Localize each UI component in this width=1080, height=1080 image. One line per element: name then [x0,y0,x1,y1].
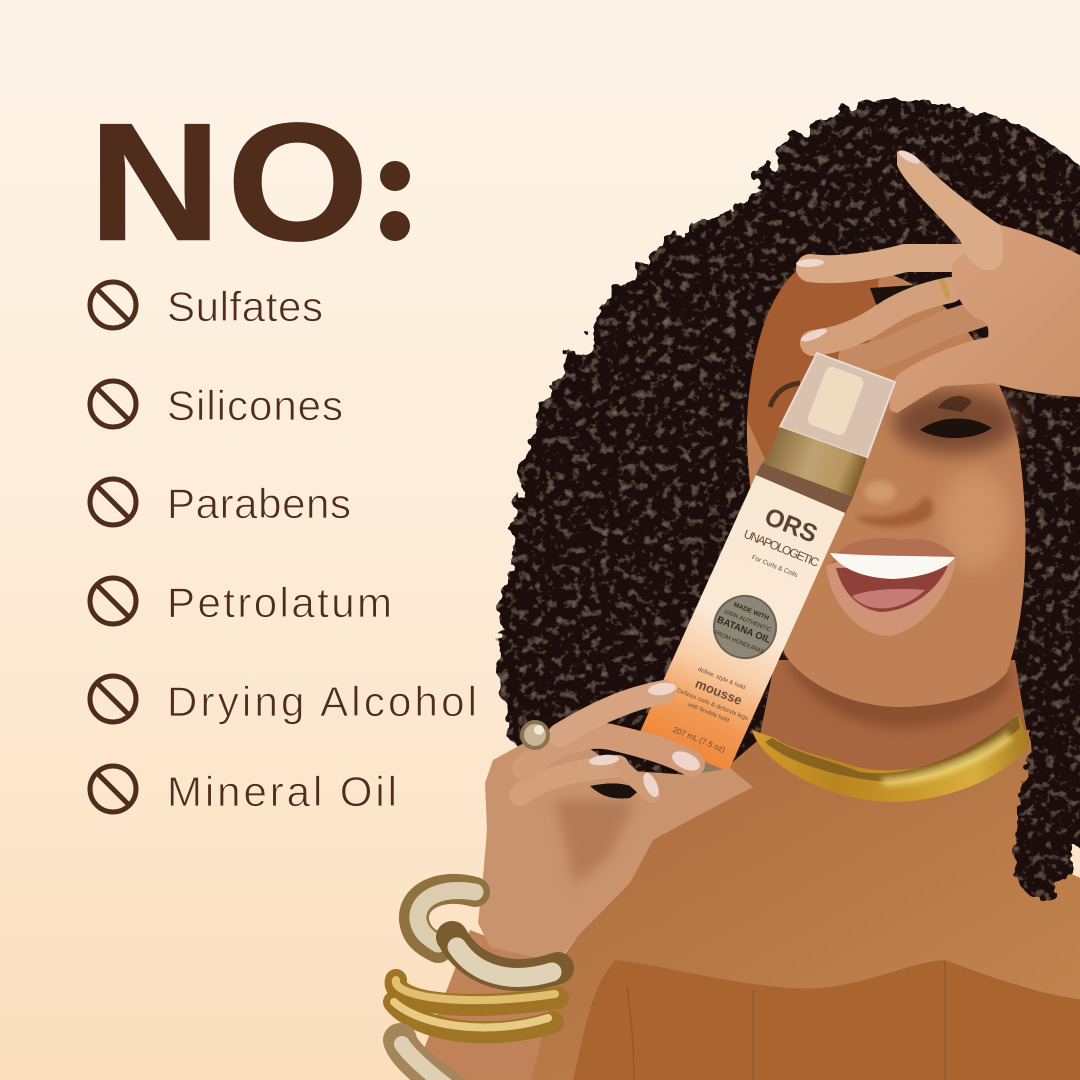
batana oil seal: BATANA OIL [715,615,772,646]
nose [855,481,933,527]
palm shadow [555,800,635,885]
hair gap in hand [590,783,640,798]
curled finger [520,766,652,795]
gold bracelets [394,889,558,1080]
bottle label: For Curls & Coils [750,554,799,579]
product bottle [639,353,895,788]
ring [938,278,952,300]
palm [478,725,753,963]
title: : [372,114,417,265]
bottle label: UNAPOLOGETIC [742,527,822,570]
middle finger [525,736,692,768]
item: Parabens [90,479,351,527]
item: Silicones [90,381,343,429]
bottle label: mousse [693,676,744,708]
hair [499,100,1080,795]
item: Sulfates [90,282,323,330]
bottle label: with flexible hold [686,702,730,724]
bottle label [671,502,822,754]
bottle label: Defines curls & defends legs [676,688,749,722]
bottle cap [780,353,895,458]
item: Parabens: Parabens [167,480,351,527]
bottle base [692,757,730,788]
item: Sulfates: Sulfates [167,283,323,330]
necklace [752,713,1030,802]
eyebrow [770,383,800,407]
title: O [227,89,369,276]
index finger [560,692,664,735]
bottle label: 207 mL (7.5 oz) [671,725,727,754]
title: N [89,89,221,276]
under chin shadow [790,650,1010,728]
item: Mineral Oil: Mineral Oil [167,768,397,815]
mouth [826,538,956,636]
forehead shade [747,268,880,470]
item: Drying Alcohol: Drying Alcohol [167,678,477,725]
bottle label: define, style & hold [697,667,746,691]
raised hand [796,148,1080,413]
item: Silicones: Silicones [167,382,343,429]
third finger [852,312,985,358]
nails [589,681,703,799]
eye [920,396,992,438]
right hair strands over the shoulder [1013,690,1080,899]
photo: woman holding the bottle [394,100,1080,1080]
dark gaps between fingers [870,285,995,340]
batana oil seal [705,587,785,667]
face and neck [747,268,1028,781]
top finger [897,151,1003,270]
chest and shoulders [460,730,1080,1080]
lower hand and arm [410,681,753,1080]
list: excluded ingredients [90,282,477,815]
gold collar [762,427,867,500]
item: Petrolatum: Petrolatum [167,579,392,626]
batana oil seal: MADE WITH [732,601,770,622]
eye socket shade [893,390,1017,454]
nails [796,148,921,344]
ring [522,722,548,748]
index finger [810,258,970,269]
title [89,89,417,276]
batana oil seal: 100% AUTHENTIC [722,609,773,634]
bottle body [639,475,845,772]
cheek highlight [940,470,1010,570]
strapless dress [572,960,1080,1080]
forearm [410,930,560,1080]
palm and thumb [889,225,1080,413]
second finger [813,290,950,343]
batana oil seal: FROM HONDURAS [713,630,765,656]
bottle label: ORS [761,502,821,549]
